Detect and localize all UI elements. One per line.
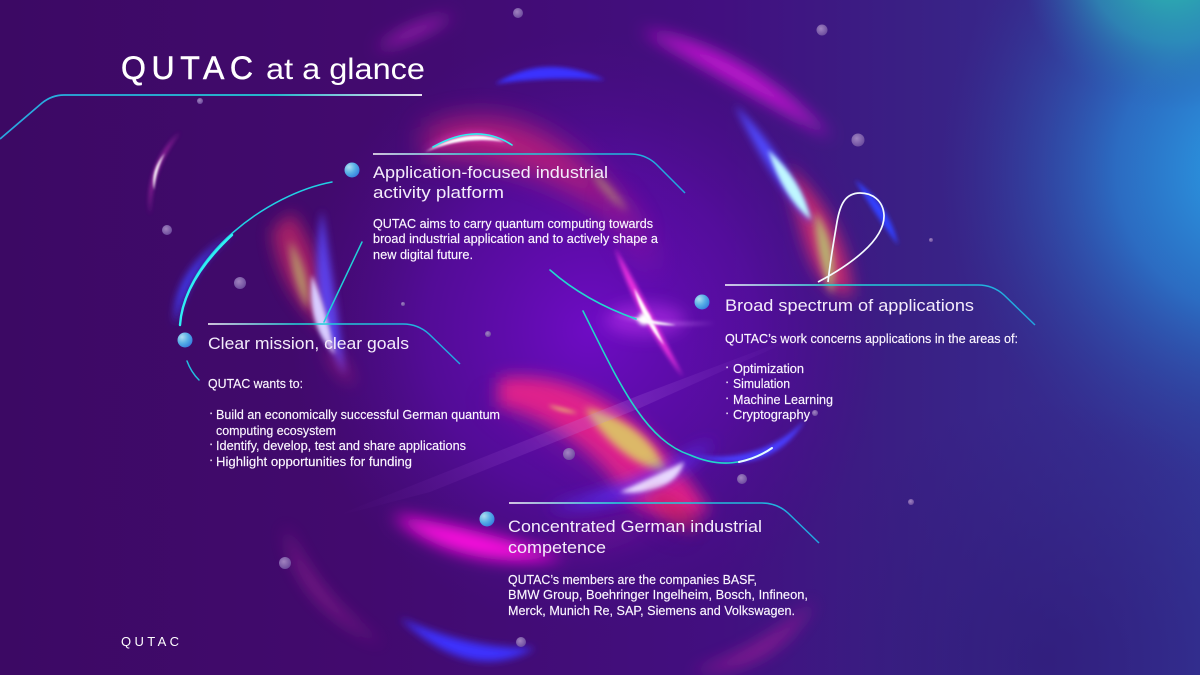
- body text: competence: BMW Group, Boehringer Ingelheim, Bosch, Infineon,: [508, 588, 808, 602]
- body text: mission: computing ecosystem: [216, 424, 336, 438]
- bullet dot: spectrum: [694, 294, 710, 310]
- body text: platform: new digital future.: [373, 248, 473, 262]
- heading: platform: Application-focused industrial: [373, 163, 608, 182]
- left red and lavender arcs: [272, 212, 328, 332]
- right arc with cyan core: [785, 165, 852, 297]
- panel: broad spectrum: [694, 285, 1035, 422]
- body text: spectrum: ·: [725, 375, 729, 389]
- lower magenta arc: [392, 515, 565, 561]
- body text: spectrum: ·: [725, 406, 729, 420]
- body text: spectrum: QUTAC’s work concerns applications in the areas of:: [725, 332, 1018, 346]
- central pink band: [498, 376, 710, 516]
- title: at a glance: [266, 53, 425, 86]
- diagonal light band: [330, 326, 823, 518]
- body text: spectrum: Cryptography: [733, 408, 811, 422]
- body text: platform: QUTAC aims to carry quantum computing towards: [373, 217, 653, 231]
- body text: spectrum: Optimization: [733, 362, 804, 376]
- upper left magenta arc: [375, 15, 455, 50]
- footer logo: QUTAC: [121, 634, 179, 649]
- heading: spectrum: Broad spectrum of applications: [725, 296, 974, 315]
- body text: spectrum: [725, 332, 1018, 422]
- bullet dot: platform: [344, 162, 360, 178]
- title: QUTAC: [121, 50, 253, 86]
- central star flare: [605, 248, 715, 377]
- top pink arc glow: [425, 118, 645, 240]
- body text: competence: [508, 573, 808, 618]
- upper centre blue arc: [495, 67, 605, 84]
- bullet dot: mission: [178, 332, 192, 348]
- cyan orbit curves: [180, 134, 772, 463]
- bullet dot: competence: [480, 512, 494, 526]
- body text: spectrum: Simulation: [733, 377, 790, 391]
- blue glow behind loop: [855, 180, 898, 245]
- body text: mission: [208, 377, 500, 469]
- blue glow under curve: [690, 420, 805, 462]
- white loop curve: [818, 193, 884, 282]
- panel: concentrated competence: competence: [508, 538, 606, 557]
- body text: mission: ·: [209, 453, 213, 467]
- body text: mission: ·: [209, 437, 213, 451]
- body text: competence: QUTAC’s members are the companies BASF,: [508, 573, 757, 587]
- small far left flare: [149, 132, 180, 215]
- body text: mission: ·: [209, 406, 213, 420]
- body text: platform: broad industrial application and to actively shape a: [373, 232, 658, 246]
- body text: competence: Merck, Munich Re, SAP, Siemens and Volkswagen.: [508, 604, 795, 618]
- body text: spectrum: ·: [725, 391, 729, 405]
- faint lower arcs: [285, 525, 385, 645]
- panel: concentrated competence: [480, 503, 819, 618]
- body text: mission: QUTAC wants to:: [208, 377, 303, 391]
- heading: mission: Clear mission, clear goals: [208, 334, 409, 353]
- top arc white core: [420, 133, 515, 153]
- glowing quantum light swirls: [149, 15, 898, 672]
- panel: application-focused platform: activity platform: [373, 183, 504, 202]
- panel: application-focused platform: [344, 154, 685, 262]
- white and blue flare below the band: [545, 440, 715, 508]
- body text: spectrum: Machine Learning: [733, 393, 833, 407]
- upper right magenta arc: [640, 30, 832, 138]
- body text: mission: Build an economically successful German quantum: [216, 408, 500, 422]
- big arc blue glow: [175, 232, 235, 325]
- heading: competence: Concentrated German industrial: [508, 517, 762, 536]
- panel: clear mission: [178, 324, 500, 469]
- body text: spectrum: ·: [725, 360, 729, 374]
- title: [0, 50, 425, 139]
- body text: mission: Highlight opportunities for funding: [216, 455, 412, 469]
- body text: mission: Identify, develop, test and share applications: [216, 439, 466, 453]
- decorative spheres: [162, 8, 933, 647]
- body text: platform: [373, 217, 658, 262]
